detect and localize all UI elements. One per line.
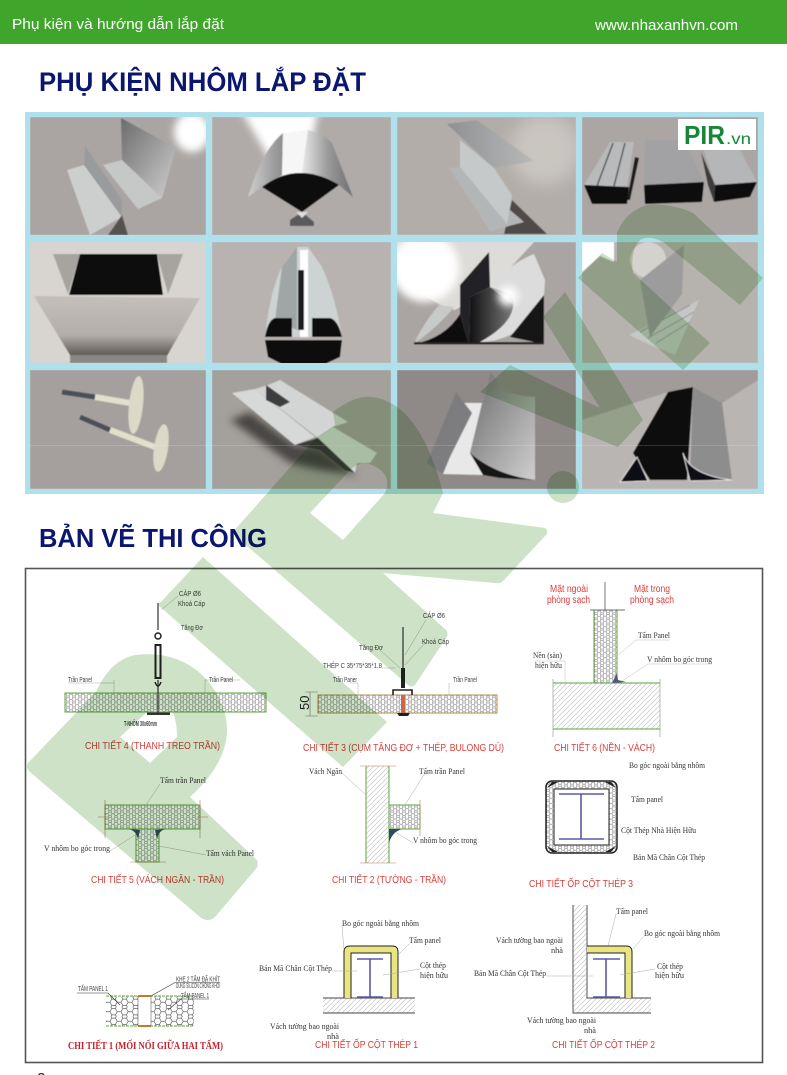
detail: steel column cladding 3 [529,761,706,890]
detail 3: turnbuckle and steel: 50 [297,696,312,710]
heading: construction drawings: BẢN VẼ THI CÔNG [39,523,267,553]
watermark: PIR.vn logo [27,205,763,920]
header title: Phụ kiện và hướng dẫn lắp đặt [12,16,224,33]
detail 1: joint between two panels: KHE 2 TẤM ĐÃ KHÍT [176,974,220,984]
detail: steel column cladding 2: Bản Mã Chân Cột Thép [474,969,546,978]
photo 9: plastic insulation anchors [30,370,206,489]
photo 1: angle profiles [30,112,210,235]
photo 7: double curved profile [391,234,576,363]
detail 3: turnbuckle and steel: Tăng Đơ [359,645,383,652]
detail 6: floor to wall: Tấm Panel [638,631,671,640]
detail 4: ceiling hanger rod: T-NHÔM 30x60mm [124,719,157,728]
detail: steel column cladding 3: Tấm panel [631,795,664,804]
detail: steel column cladding 2: Cột thép [657,962,683,971]
detail: steel column cladding 1: hiện hữu [420,971,448,980]
panel: construction drawings frame [26,568,762,1062]
logo: PIR.vn: .vn [726,131,751,148]
header bar [0,0,787,44]
photo 4: rectangular profiles with logo [582,117,758,235]
detail 6: floor to wall: Mặt trong [634,584,670,595]
detail 6: floor to wall: hiện hữu [535,661,562,670]
detail 3: turnbuckle and steel [297,611,504,754]
detail: steel column cladding 2: nhà [584,1026,596,1035]
detail 6: floor to wall: Mặt ngoài [550,584,588,595]
detail 2: wall to ceiling: Vách Ngăn [309,767,342,776]
detail: steel column cladding 1 [259,919,448,1051]
heading: accessories: PHỤ KIỆN NHÔM LẮP ĐẶT [39,66,366,97]
photo 12: hollow corner profile [582,370,758,489]
caption: detail 4: CHI TIẾT 4 (THANH TREO TRẦN) [85,739,220,752]
detail 6: floor to wall: phòng sạch [630,595,674,606]
detail: steel column cladding 3: Bo góc ngoài bằng nhôm [629,761,706,770]
detail: steel column cladding 2 [474,905,721,1051]
detail 3: turnbuckle and steel: Khoá Cáp [422,639,449,646]
detail 4: ceiling hanger rod: Trần Panel [209,675,233,684]
detail: steel column cladding 2: Bo góc ngoài bằng nhôm [644,929,721,938]
detail: steel column cladding 3: Cột Thép Nhà Hiện Hữu [621,826,696,835]
detail 4: ceiling hanger rod: CÁP Ø6 [179,589,201,598]
detail 2: wall to ceiling: Tấm trần Panel [419,767,466,776]
photo 5: U channel [30,242,206,363]
caption: detail 6: CHI TIẾT 6 (NỀN - VÁCH) [554,741,655,754]
detail: steel column cladding 2: Vách tường bao ngoài [527,1016,597,1025]
detail 5: partition to ceiling: Tấm vách Panel [206,849,255,858]
detail 1: joint between two panels: TẤM PANEL 1 [78,983,108,993]
photo 10: flat clip profile [212,370,391,489]
detail: steel column cladding 1: Tấm panel [409,936,442,945]
detail: steel column cladding 1: Bo góc ngoài bằng nhôm [342,919,420,928]
caption: detail 3: CHI TIẾT 3 (CỤM TĂNG ĐƠ + THÉP, BULONG DÙ) [303,741,504,754]
caption: detail 2: CHI TIẾT 2 (TƯỜNG - TRẦN) [332,873,446,886]
photo 11: angle with curved profile [397,370,576,489]
panel: construction drawings frame: DÙNG SILICON CHỐNG KHÓI [176,980,220,990]
caption: detail 1: CHI TIẾT 1 (MỐI NỐI GIỮA HAI TẤM) [68,1039,223,1052]
detail: steel column cladding 2: Vách tường bao ngoài [496,936,564,945]
header website: www.nhaxanhvn.com [594,18,738,34]
caption: detail 5: CHI TIẾT 5 (VÁCH NGĂN - TRẦN) [91,873,224,886]
photo 3: I-beam profile [397,115,580,235]
detail: steel column cladding 1: Bản Mã Chân Cột Thép [259,964,332,973]
detail 2: wall to ceiling [309,766,477,886]
detail: steel column cladding 2: nhà [551,946,563,955]
detail 6: floor to wall [533,582,712,754]
detail 1: joint between two panels: TẤM PANEL 1 [181,990,209,1000]
photo 2: rounded corner profile [212,112,391,235]
detail: steel column cladding 1: nhà [327,1032,339,1041]
detail: steel column cladding 2: Tấm panel [616,907,649,916]
detail 4: ceiling hanger rod: Trần Panel [68,675,92,684]
detail 6: floor to wall: phòng sạch [547,595,590,606]
caption: column cladding 2: CHI TIẾT ỐP CỘT THÉP 2 [552,1037,655,1051]
detail: steel column cladding 1: Vách tường bao ngoài [270,1022,340,1031]
detail 5: partition to ceiling [44,776,255,886]
detail 2: wall to ceiling: V nhôm bo góc trong [413,836,477,845]
detail: steel column cladding 2: hiện hữu [655,971,684,980]
detail 4: ceiling hanger rod [65,589,266,752]
logo: PIR.vn: PIR [684,120,725,150]
detail 4: ceiling hanger rod: Khoá Cáp [178,601,205,608]
detail 3: turnbuckle and steel: Trần Panel [453,675,477,684]
panel: aluminium accessories photo grid [25,112,764,494]
photo 6: T track profile [212,242,391,364]
detail 5: partition to ceiling: V nhôm bo góc trong [44,844,110,853]
detail 3: turnbuckle and steel: CÁP Ø6 [423,611,445,620]
detail 3: turnbuckle and steel: THÉP C 35*75*35*1.8 [323,661,382,670]
detail 6: floor to wall: V nhôm bo góc trong [647,655,712,664]
photo 8: T fin profile [582,242,758,363]
detail 6: floor to wall: Nền (sàn) [533,651,562,660]
detail 5: partition to ceiling: Tấm trần Panel [160,776,207,785]
detail 3: turnbuckle and steel: Trần Paner [333,675,357,684]
detail: steel column cladding 3: Bản Mã Chân Cột Thép [633,853,705,862]
detail: steel column cladding 1: Cột thép [420,961,446,970]
detail 4: ceiling hanger rod: Tăng Đơ [181,625,203,632]
caption: column cladding 3: CHI TIẾT ỐP CỘT THÉP 3 [529,876,633,890]
caption: column cladding 1: CHI TIẾT ỐP CỘT THÉP 1 [315,1037,418,1051]
detail 1: joint between two panels [68,974,223,1052]
logo: PIR.vn [678,119,756,150]
